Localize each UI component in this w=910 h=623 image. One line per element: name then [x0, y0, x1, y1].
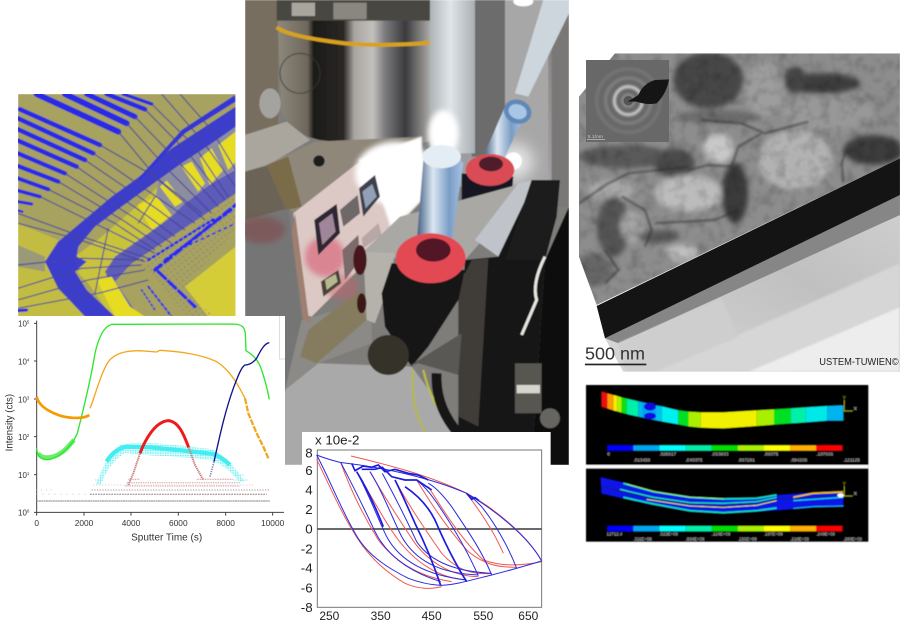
lower colour scale: .934E+08 [686, 536, 705, 541]
chart labels: 10 [18, 357, 27, 366]
panel: depth profile chart: 2000 [75, 518, 94, 528]
x axis labels: 250 [319, 609, 340, 623]
dense pattern along the die edge [142, 197, 236, 317]
upper colour scale: .121125 [843, 457, 860, 462]
cyan trace [96, 443, 245, 485]
lower colour scale: .280E+09 [843, 536, 863, 541]
wires [413, 370, 425, 432]
chart labels: 10 [18, 395, 27, 404]
lower axis triad [843, 481, 858, 497]
lower colour scale: 12712.4 [607, 532, 623, 537]
noise floor bands [37, 475, 270, 501]
red trace [140, 421, 189, 453]
knobs [353, 245, 367, 275]
upper FEM beam [602, 392, 843, 428]
upper colour scale: .094208 [790, 457, 808, 462]
lower colour scale: .311E+08 [633, 536, 652, 541]
lower axis triad: Y [843, 481, 847, 487]
chart labels: 4 [27, 357, 30, 362]
chip dies [314, 175, 382, 297]
chart labels: 10 [18, 471, 27, 480]
copyright credit: USTEM-TUWIEN© [819, 357, 899, 368]
chart labels: 1 [27, 471, 30, 476]
upper colour scale: .067291 [738, 457, 755, 462]
x axis labels: 650 [518, 609, 539, 623]
chart labels: 10 [18, 509, 27, 518]
chart labels: 10 [18, 320, 27, 329]
far glass bulb [484, 108, 521, 158]
panel: depth profile chart: 10000 [261, 518, 285, 528]
lower colour scale: .249E+09 [816, 532, 836, 537]
orange trace [37, 397, 89, 418]
inset: diffraction pattern [586, 60, 669, 142]
chart labels: 5 [27, 320, 30, 325]
chart labels: 3 [27, 395, 30, 400]
lower colour scale [607, 526, 863, 541]
upper axis triad [843, 395, 858, 412]
blue curves [317, 455, 542, 585]
chart labels: 10 [18, 433, 27, 442]
upper axis triad: X [854, 406, 858, 412]
lower axis triad: X [854, 491, 858, 497]
panel: depth profile chart: 0 [34, 518, 39, 528]
x axis labels: 450 [422, 609, 442, 623]
glowing circuit sample [293, 137, 422, 317]
holder block [364, 186, 516, 270]
upper colour scale: .053833 [712, 452, 729, 457]
blue fingers [18, 94, 152, 311]
upper colour scale: .107666 [816, 452, 834, 457]
y axis labels: 8 [305, 445, 313, 460]
background metal [245, 34, 569, 431]
panel: false-colour yellow and blue sample map [18, 94, 236, 317]
panel: depth profile chart [5, 316, 285, 551]
upper colour scale: .026917 [659, 452, 677, 457]
far fitting [461, 172, 514, 200]
panel: photo of sample holder under microscope [238, 0, 569, 465]
upper colour scale: 0 [607, 452, 610, 457]
lower colour scale: .156E+09 [738, 536, 757, 541]
upper vertical glass tube [430, 0, 475, 153]
chart labels: 2 [27, 433, 30, 438]
lower colour scale: .187E+09 [764, 532, 783, 537]
y axis labels: -4 [301, 561, 313, 576]
red curves [317, 456, 542, 588]
y axis labels: 2 [305, 502, 313, 517]
lower left rail [245, 122, 310, 172]
lower FEM beam [601, 477, 844, 513]
panel: depth profile chart: Sputter Time (s) [131, 532, 202, 543]
zero line [317, 526, 542, 531]
navy trace [210, 462, 214, 477]
panel: hysteresis loop chart [301, 432, 551, 623]
diagonal glass tube [515, 0, 569, 97]
heavy noisy blue traces [352, 463, 479, 585]
microscope objective [278, 20, 430, 142]
upper colour scale: .08075 [764, 452, 779, 457]
near fitting [382, 263, 465, 367]
y axis labels [301, 445, 313, 615]
glowing spot [505, 152, 522, 170]
bright yellow strips [97, 132, 236, 317]
panel: depth profile chart: 4000 [122, 518, 141, 528]
grey-blue zone around the strips [155, 127, 236, 217]
table surface [285, 362, 452, 465]
panel: finite element simulation results [586, 385, 868, 542]
panel: depth profile chart: 8000 [216, 518, 235, 528]
plot frame [317, 450, 542, 607]
upper colour scale [607, 445, 860, 462]
lower colour scale: .124E+09 [712, 532, 731, 537]
microstructure grains [575, 50, 903, 317]
y axis labels: 0 [305, 522, 313, 537]
y axis labels: -6 [301, 580, 313, 595]
panel: TEM micrograph [575, 50, 903, 375]
axes [34, 321, 284, 516]
upper colour scale: .040375 [686, 457, 703, 462]
x axis labels: 350 [371, 609, 391, 623]
y axis labels: 4 [305, 482, 313, 497]
near glass tube [416, 160, 464, 239]
lower substrate layers [605, 215, 900, 372]
y axis labels: -8 [301, 600, 313, 615]
upper axis triad: Y [843, 395, 847, 401]
y axis labels: 6 [305, 463, 313, 478]
multiplier label: x 10e-2 [315, 433, 359, 448]
y axis labels: -2 [301, 541, 313, 556]
green trace [38, 438, 75, 462]
chart labels [18, 320, 30, 518]
x axis labels [319, 609, 539, 623]
sample mount plate [267, 137, 422, 213]
panel: depth profile chart: 6000 [169, 518, 188, 528]
blue bands [45, 95, 236, 317]
dark film layer [597, 158, 900, 338]
panel: depth profile chart: Intensity (cts) [5, 394, 16, 451]
inset: diffraction pattern: 5.1/nm [588, 134, 603, 140]
lower colour scale: .218E+09 [790, 536, 810, 541]
chart labels: 0 [27, 509, 30, 514]
thin connecting lines [18, 94, 236, 308]
x axis labels: 550 [473, 609, 494, 623]
upper colour scale: .013458 [633, 457, 651, 462]
lower colour scale: .622E+08 [659, 532, 679, 537]
scale bar label: 500 nm [585, 343, 645, 363]
